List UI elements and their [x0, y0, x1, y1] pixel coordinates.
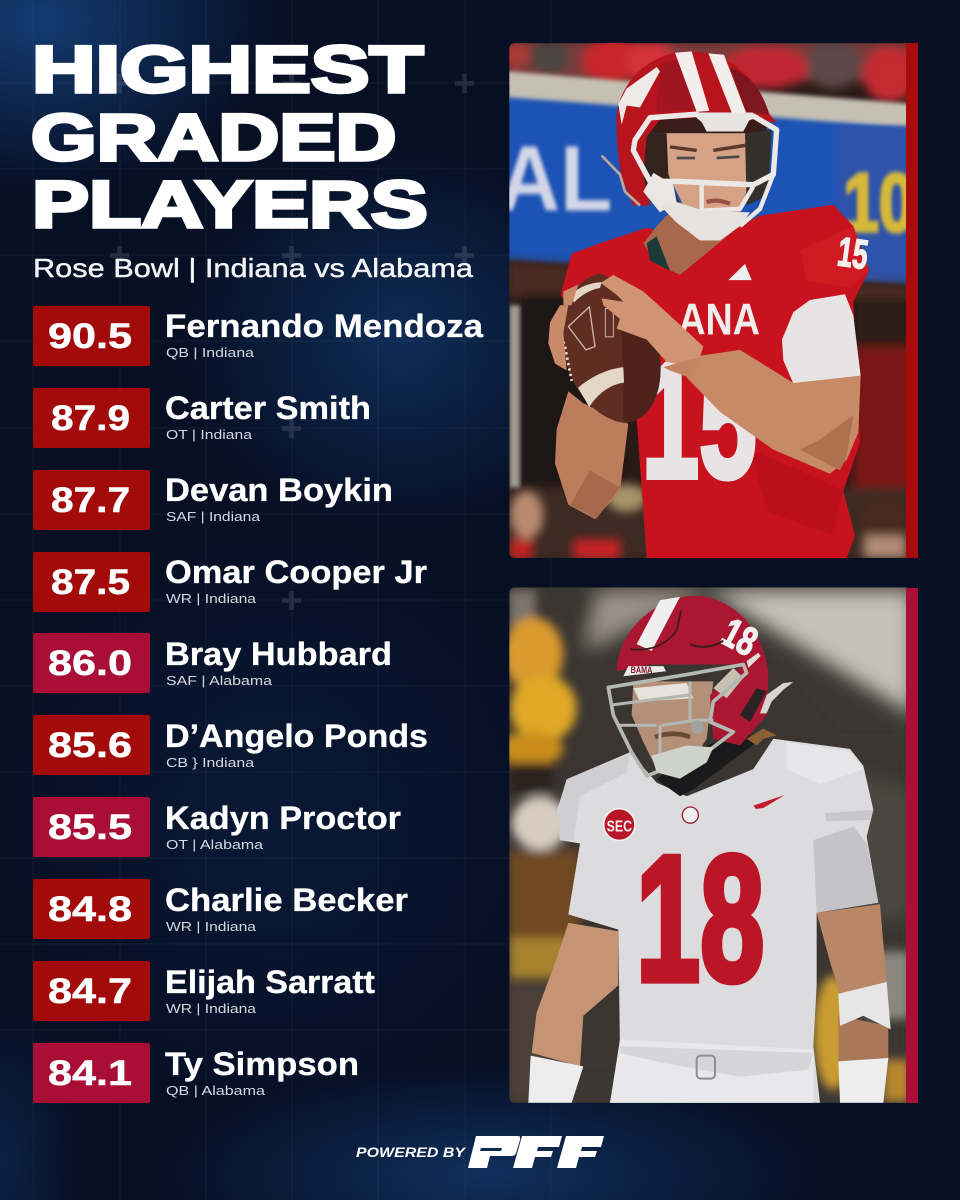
row: Charlie Becker: WR | Indiana: [166, 919, 257, 934]
player: safety: [528, 596, 891, 1103]
row: Carter Smith: [33, 388, 371, 448]
photo background: AL: [498, 126, 612, 230]
row: Kadyn Proctor: [33, 797, 401, 857]
title: [31, 33, 428, 242]
row: Devan Boykin: Devan Boykin: [165, 472, 393, 508]
PFF logo mark: [468, 1136, 604, 1168]
row: D'Angelo Ponds: [33, 715, 428, 775]
row: Omar Cooper Jr: Omar Cooper Jr: [165, 554, 427, 590]
title: GRADED: [31, 101, 396, 175]
accent bar: Alabama: [906, 588, 918, 1103]
row: Charlie Becker: [33, 879, 408, 939]
row: Fernando Mendoza: Fernando Mendoza: [165, 308, 484, 344]
row: Elijah Sarratt: [33, 961, 375, 1021]
row: Bray Hubbard: [33, 633, 392, 693]
row: D'Angelo Ponds: D’Angelo Ponds: [165, 718, 428, 754]
row: Charlie Becker: Charlie Becker: [165, 882, 408, 918]
footer: powered by PFF logo: POWERED BY: [356, 1145, 467, 1160]
subtitle: Rose Bowl | Indiana vs Alabama: [33, 253, 474, 283]
photo panel: Indiana quarterback: [497, 37, 917, 560]
title: PLAYERS: [32, 168, 428, 242]
row: Devan Boykin: SAF | Indiana: [166, 509, 261, 524]
player: quarterback: [548, 51, 871, 558]
row: Elijah Sarratt: 84.7: [48, 972, 132, 1011]
player: safety: 18: [636, 818, 764, 1019]
row: Elijah Sarratt: Elijah Sarratt: [165, 964, 375, 1000]
row: Kadyn Proctor: 85.5: [48, 808, 132, 847]
photo background: 10: [843, 156, 915, 249]
row: Carter Smith: Carter Smith: [165, 390, 371, 426]
row: D'Angelo Ponds: 85.6: [48, 726, 132, 765]
row: Elijah Sarratt: WR | Indiana: [166, 1001, 257, 1016]
row: Ty Simpson: [33, 1043, 359, 1103]
row: Carter Smith: OT | Indiana: [166, 427, 253, 442]
player list: [33, 306, 484, 1103]
row: D'Angelo Ponds: CB } Indiana: [166, 755, 255, 770]
row: Bray Hubbard: SAF | Alabama: [166, 673, 273, 688]
row: Ty Simpson: 84.1: [48, 1054, 132, 1093]
row: Fernando Mendoza: [33, 306, 484, 366]
row: Omar Cooper Jr: [33, 552, 427, 612]
player: quarterback: 15: [642, 329, 757, 513]
player: safety: SEC: [607, 818, 632, 835]
row: Kadyn Proctor: Kadyn Proctor: [165, 800, 401, 836]
row: Devan Boykin: [33, 470, 393, 530]
player: safety: 18: [714, 609, 765, 665]
row: Ty Simpson: QB | Alabama: [166, 1083, 266, 1098]
row: Kadyn Proctor: OT | Alabama: [166, 837, 264, 852]
row: Bray Hubbard: Bray Hubbard: [165, 636, 392, 672]
row: Omar Cooper Jr: 87.5: [51, 564, 130, 602]
row: Bray Hubbard: 86.0: [48, 644, 132, 683]
photo panel: Alabama safety: [497, 587, 913, 1103]
row: Charlie Becker: 84.8: [48, 890, 132, 929]
row: Ty Simpson: Ty Simpson: [165, 1046, 359, 1082]
row: Carter Smith: 87.9: [51, 400, 130, 438]
row: Devan Boykin: 87.7: [51, 482, 130, 520]
photo background: [497, 37, 917, 560]
row: Omar Cooper Jr: WR | Indiana: [166, 591, 257, 606]
accent bar: Indiana: [906, 43, 918, 558]
row: Fernando Mendoza: QB | Indiana: [166, 345, 255, 360]
photo background: [497, 587, 913, 1103]
title: HIGHEST: [32, 33, 423, 106]
player: quarterback: 15: [835, 228, 871, 278]
player: safety: BAMA: [631, 665, 653, 675]
player: quarterback: ANA: [678, 295, 760, 345]
row: Fernando Mendoza: 90.5: [48, 317, 132, 356]
footer: powered by PFF logo: [356, 1136, 604, 1168]
